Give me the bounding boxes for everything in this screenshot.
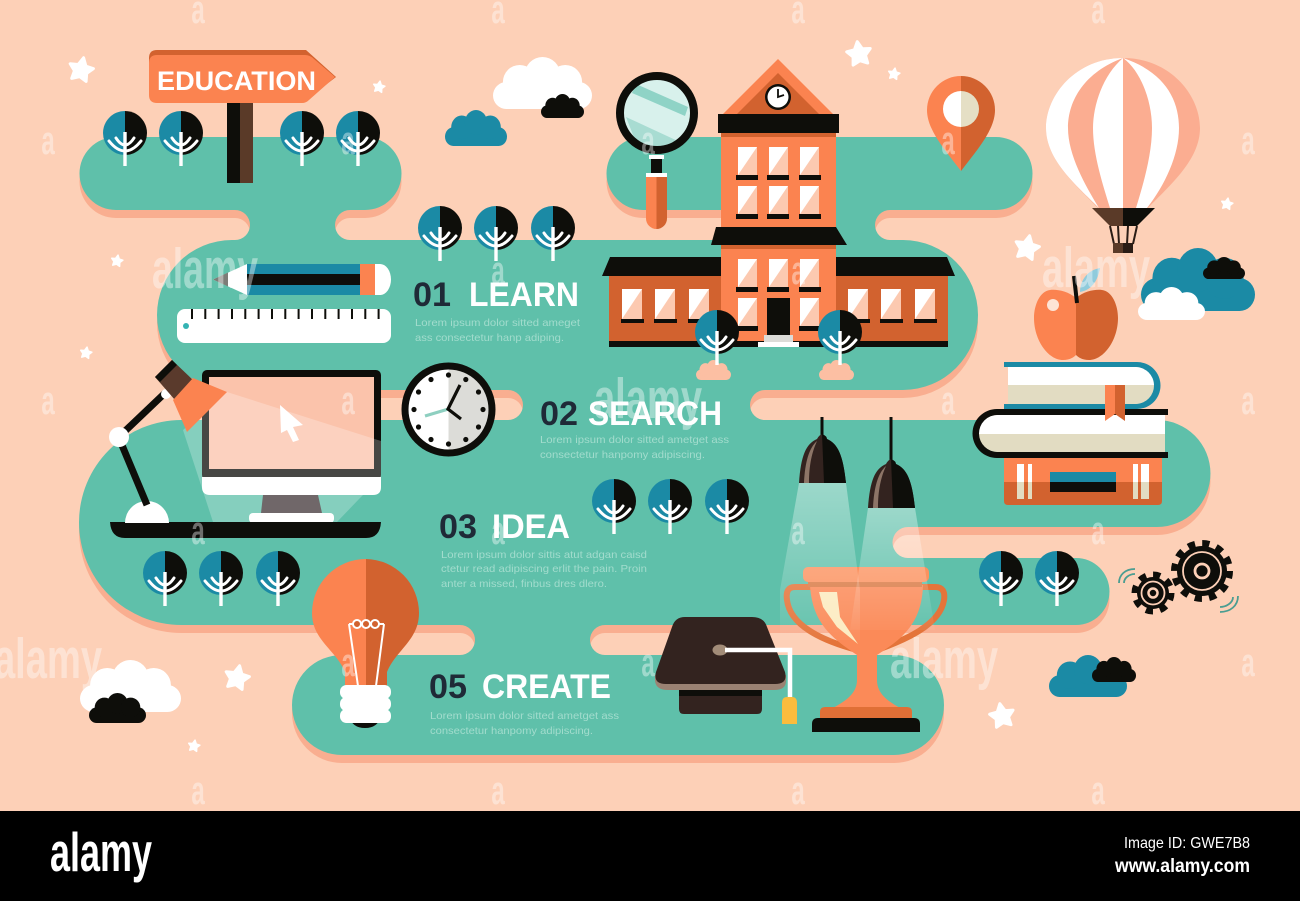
icon: location pin — [927, 76, 995, 171]
step 03: idea: 03 — [439, 508, 477, 546]
icon: pendant lamps — [780, 417, 935, 640]
clouds: lower left — [80, 660, 181, 723]
watermarks: a — [791, 508, 805, 552]
step 02: search: 02 — [540, 395, 578, 433]
watermarks: a — [191, 508, 205, 552]
right pendant lamp — [868, 417, 915, 508]
footer bar: www.alamy.com — [1114, 856, 1250, 877]
step 02: search: SEARCH — [588, 395, 722, 433]
step 01: learn: Lorem ipsum dolor sitted ameget — [415, 317, 580, 329]
watermarks: a — [641, 118, 655, 162]
step 02: search: Lorem ipsum dolor sitted ametget ass — [540, 434, 729, 446]
footer bar — [0, 811, 1300, 901]
watermarks: alamy — [890, 627, 998, 691]
step 01: learn: ass consectetur hanp adiping. — [415, 332, 564, 344]
icon: trophy — [787, 567, 944, 732]
winding path panel — [79, 137, 1210, 763]
watermarks: a — [641, 640, 655, 684]
step 03: idea: anter a missed, finbus dres dlero. — [441, 578, 607, 590]
icon: graduation cap — [655, 617, 797, 724]
step 01: learn: LEARN — [469, 276, 579, 314]
watermarks: a — [941, 378, 955, 422]
watermarks: a — [1241, 378, 1255, 422]
trees and bushes at school — [695, 310, 862, 380]
icon: desk lamp — [109, 360, 227, 523]
icon: magnifier — [620, 76, 694, 229]
icon: hot air balloon — [1046, 58, 1200, 253]
watermarks: alamy — [1042, 236, 1150, 300]
step 01: learn: 01 — [413, 276, 451, 314]
step 05: create: CREATE — [482, 668, 611, 706]
middle book — [972, 409, 1168, 458]
icon: cursor arrow — [280, 405, 303, 442]
trees: below desk — [143, 551, 300, 606]
footer bar: alamy — [50, 821, 152, 883]
top book — [1004, 362, 1160, 409]
icon: ruler — [177, 309, 391, 343]
step 05: create — [429, 668, 619, 737]
clouds: right — [1138, 248, 1255, 320]
small gear — [1134, 574, 1172, 612]
step 03: idea — [439, 508, 647, 590]
step 02: search — [540, 395, 729, 461]
icon: computer monitor — [202, 370, 381, 523]
trees: above learn — [418, 206, 575, 261]
watermarks: a — [341, 378, 355, 422]
school wings — [602, 257, 955, 347]
school clock — [765, 84, 791, 110]
watermarks: a — [341, 640, 355, 684]
bookmark — [1105, 385, 1125, 421]
icon: light bulb — [312, 559, 419, 728]
icon: apple — [1034, 268, 1118, 360]
trees: top left — [103, 111, 380, 166]
school tower — [711, 59, 847, 347]
step 03: idea: ctetur read adipiscing erlit the pain. Proin — [441, 563, 647, 575]
trees: right — [979, 551, 1079, 606]
watermarks: a — [341, 118, 355, 162]
bottom book — [1004, 458, 1162, 505]
watermarks: a — [1091, 508, 1105, 552]
watermarks: a — [191, 768, 205, 812]
step 01: learn — [413, 276, 580, 344]
watermarks: a — [1241, 640, 1255, 684]
watermarks: a — [41, 118, 55, 162]
watermarks: alamy — [594, 367, 702, 431]
watermarks: a — [491, 768, 505, 812]
step 02: search: consectetur hanpomy adipiscing. — [540, 449, 705, 461]
school building — [602, 59, 955, 347]
step 05: create: 05 — [429, 668, 467, 706]
watermarks: alamy — [152, 237, 258, 301]
light beams — [780, 483, 935, 640]
lamp light beam — [183, 392, 381, 522]
step 03: idea: IDEA — [492, 508, 570, 546]
footer bar: Image ID: GWE7B8 — [1124, 835, 1250, 852]
watermarks: a — [491, 508, 505, 552]
watermarks: a — [1091, 768, 1105, 812]
icon: pencil — [213, 264, 391, 295]
icon: wall clock — [402, 362, 496, 456]
icon: book stack — [972, 362, 1168, 505]
stars — [67, 40, 1234, 752]
step 03: idea: Lorem ipsum dolor sittis atut adgan caisd — [441, 549, 647, 561]
signpost: education: EDUCATION — [157, 66, 316, 96]
trees: idea row — [592, 479, 749, 534]
step 05: create: Lorem ipsum dolor sitted ametget ass — [430, 710, 619, 722]
clouds: top centre — [445, 57, 592, 146]
clouds: lower right — [1049, 655, 1136, 697]
signpost: education — [149, 50, 336, 183]
watermarks: a — [1241, 118, 1255, 162]
large gear — [1174, 544, 1230, 598]
watermarks: a — [491, 248, 505, 292]
watermarks: a — [791, 248, 805, 292]
watermarks: a — [941, 118, 955, 162]
watermarks: a — [791, 768, 805, 812]
step 05: create: consectetur hanpomy adipiscing. — [430, 725, 593, 737]
icon: gears — [1119, 544, 1238, 612]
left pendant lamp — [799, 417, 846, 483]
signal arcs — [1119, 569, 1238, 612]
desk — [110, 522, 381, 538]
watermarks: a — [41, 378, 55, 422]
